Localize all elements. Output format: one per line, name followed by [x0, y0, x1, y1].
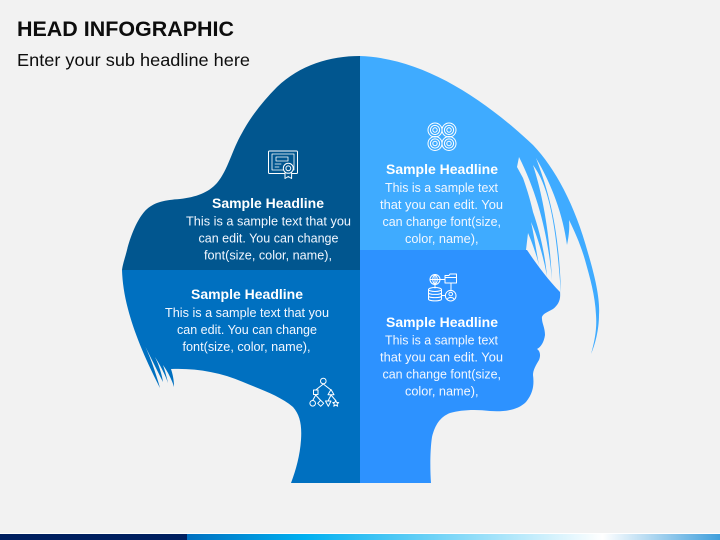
text block: top right: [380, 161, 503, 246]
panel: top left dark quadrant: [122, 56, 360, 270]
text block: bottom left: This is a sample text that you: [165, 306, 329, 320]
text block: bottom right: that you can edit. You: [380, 350, 503, 364]
text block: top right: can change font(size,: [382, 215, 501, 229]
text block: bottom right: This is a sample text: [385, 334, 499, 348]
text block: top left: can edit. You can change: [198, 232, 339, 246]
text block: bottom right: can change font(size,: [382, 368, 501, 382]
icon: network and database: [428, 274, 456, 301]
text block: bottom left: font(size, color, name),: [182, 340, 310, 354]
text block: top left: This is a sample text that you: [186, 214, 351, 228]
footer bar: [0, 533, 720, 540]
panel: bottom right face quadrant: [360, 250, 560, 483]
text block: bottom left: [165, 286, 329, 354]
text block: top right: that you can edit. You: [380, 198, 503, 212]
text block: top right: color, name),: [405, 232, 478, 246]
text block: top right: This is a sample text: [385, 181, 499, 195]
title: HEAD INFOGRAPHIC: [17, 17, 234, 41]
head infographic: [122, 56, 599, 483]
text block: top left: Sample Headline: [212, 195, 324, 211]
panel: bottom left mid-blue quadrant: [122, 270, 360, 483]
icon: certificate: [268, 151, 298, 178]
panel: top right light quadrant with hair: [360, 56, 599, 354]
subtitle: Enter your sub headline here: [17, 50, 250, 70]
text block: bottom right: [380, 314, 503, 398]
text block: bottom right: color, name),: [405, 384, 478, 398]
text block: bottom left: Sample Headline: [191, 286, 303, 302]
text block: bottom right: Sample Headline: [386, 314, 498, 330]
text block: top left: font(size, color, name),: [204, 248, 332, 262]
icon: four concentric circles: [428, 123, 456, 150]
text block: top right: Sample Headline: [386, 161, 498, 177]
text block: bottom left: can edit. You can change: [177, 323, 317, 337]
text block: top left: [186, 195, 351, 262]
icon: decision tree: [310, 378, 339, 406]
